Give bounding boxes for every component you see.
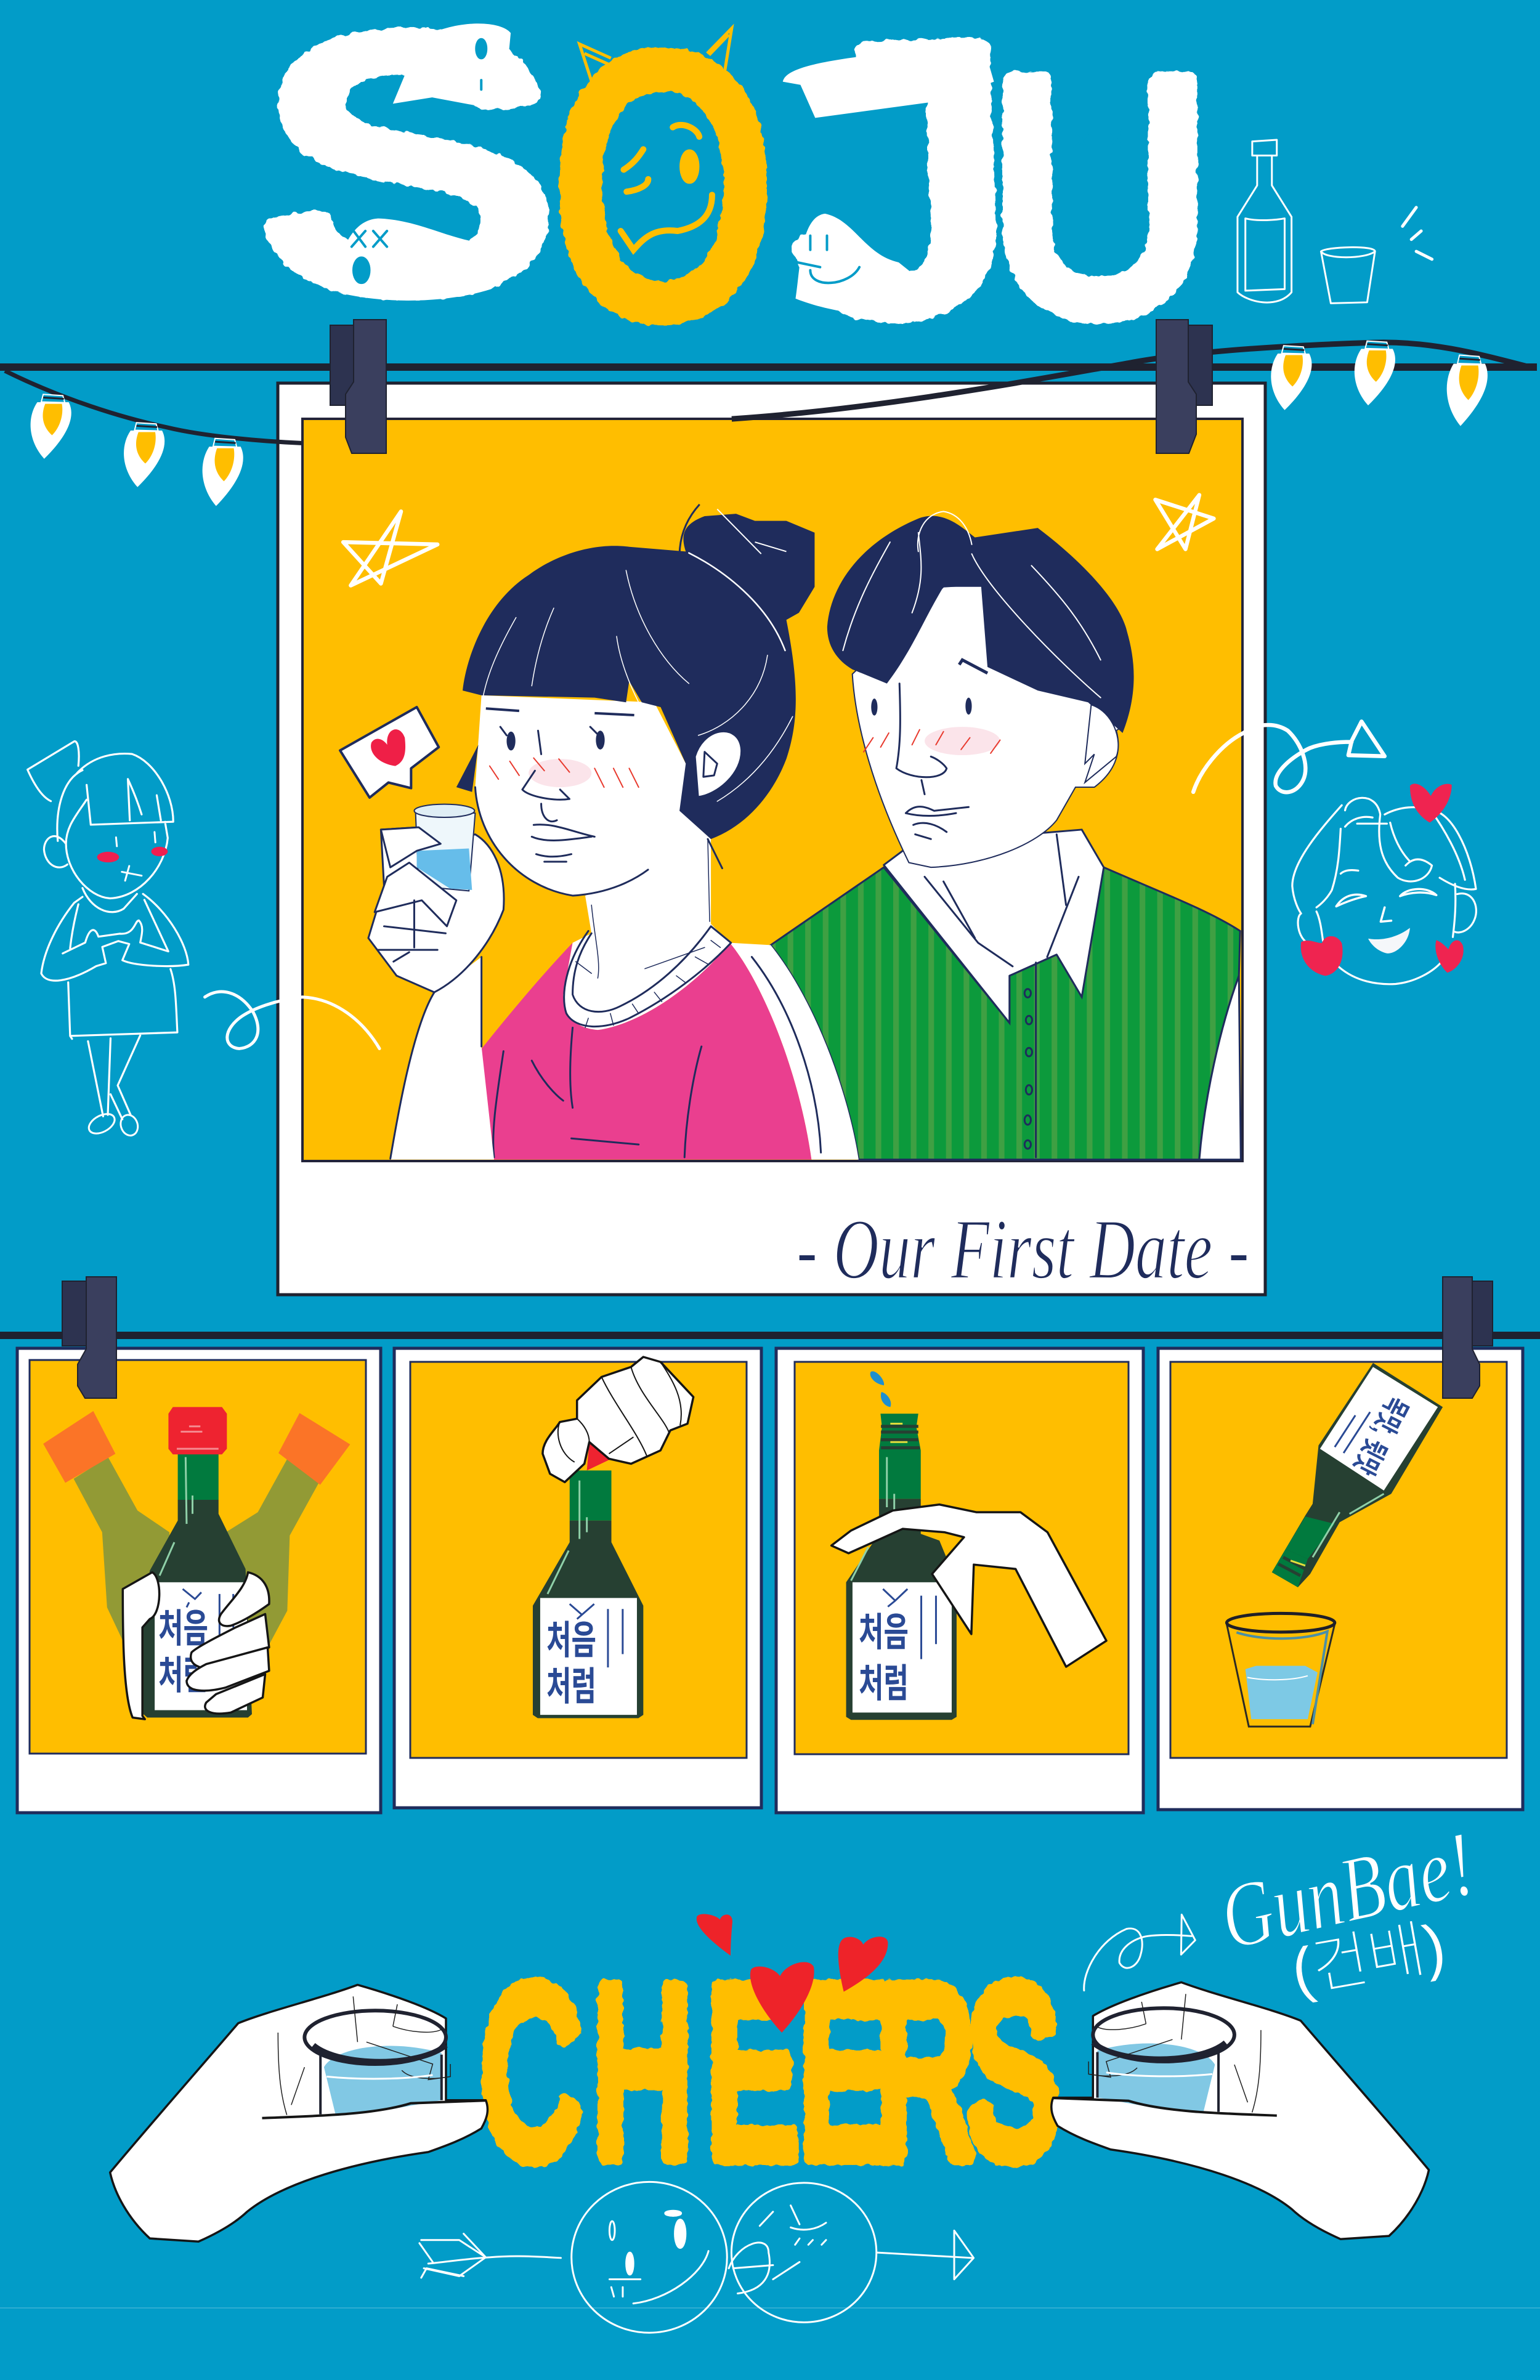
bottle label text: 처음	[546, 1618, 596, 1662]
hearts on face	[1301, 783, 1464, 976]
fingers on glass	[381, 827, 440, 867]
woman pink top	[482, 943, 811, 1160]
hand over bottle	[832, 1505, 1106, 1667]
red hearts	[697, 1914, 888, 2033]
woman	[368, 504, 859, 1160]
bottle label text line two: 처럼	[859, 1661, 909, 1706]
couple illustration	[340, 495, 1241, 1160]
face inside O	[621, 125, 712, 250]
man face	[853, 585, 1122, 867]
fist on cap	[543, 1357, 694, 1482]
clip: bottom right	[1443, 1277, 1493, 1398]
ghost head on J	[795, 214, 948, 319]
woman neck and collar	[563, 806, 730, 1030]
right light string	[732, 342, 1532, 419]
smile	[1368, 928, 1410, 953]
woman ear	[695, 732, 741, 796]
polaroid frame	[278, 383, 1265, 1295]
right hand with glass	[1052, 1982, 1429, 2239]
tilted bottle label text: 목맛, 뒷맛	[1347, 1391, 1413, 1479]
man facial features	[864, 660, 1000, 839]
man shirt and neck	[884, 830, 1104, 1023]
caption: our first date: - Our First Date -	[796, 1202, 1249, 1297]
bottom hanging string	[0, 1332, 1540, 1339]
woman arm	[391, 957, 494, 1160]
man hair	[827, 516, 1134, 733]
man vest	[771, 867, 1240, 1160]
top hanging string	[0, 363, 1537, 371]
photo yellow background	[302, 419, 1242, 1161]
left hand with glass	[110, 1985, 488, 2241]
main polaroid photo	[278, 383, 1265, 1297]
drops	[870, 1371, 891, 1407]
man	[771, 511, 1241, 1160]
kissing faces doodle	[572, 2182, 877, 2333]
woman face	[475, 695, 736, 896]
man arms	[1199, 976, 1241, 1160]
polaroid 4: pouring into glass	[1158, 1348, 1523, 1810]
faint horizontal line	[0, 2307, 1540, 2309]
star left	[343, 511, 437, 586]
doodle: bottle	[1238, 140, 1292, 302]
star right	[1155, 495, 1214, 549]
polaroid 3: tapping the bottle	[776, 1348, 1143, 1813]
cat ears on O	[580, 28, 732, 89]
red cap	[168, 1407, 227, 1454]
string lights	[5, 341, 1532, 506]
ghost head top of S	[393, 23, 511, 107]
korean gunbae text: (건배)	[1286, 1911, 1451, 2006]
doodle: glass	[1321, 247, 1375, 303]
loop arrow right	[1193, 721, 1385, 792]
brush top bar on J	[783, 41, 994, 118]
girl blush	[97, 847, 168, 862]
clip: main photo right	[1156, 320, 1212, 453]
olive arms	[74, 1457, 319, 1648]
left bulbs	[31, 394, 243, 506]
polaroid 1: bottle held up	[17, 1348, 381, 1813]
man ear	[1085, 705, 1118, 782]
bottle	[144, 1500, 252, 1717]
bottle	[846, 1499, 957, 1720]
vest buttons	[1024, 963, 1036, 1157]
arrow right	[877, 2230, 974, 2280]
woman hand	[368, 827, 504, 992]
woman hair	[463, 514, 814, 839]
title faces and cat ears	[334, 23, 1432, 319]
bottle label text line two: 처럼	[158, 1653, 208, 1698]
left light string	[5, 371, 301, 443]
bottle label text line two: 처럼	[546, 1664, 596, 1709]
hand gripping bottle	[123, 1572, 269, 1719]
right bulbs	[1271, 341, 1488, 426]
cheers illustration	[110, 1914, 1429, 2333]
cheers lettering: CHEERS	[481, 1939, 1059, 2204]
doodle: sparkle dashes	[1403, 208, 1432, 259]
shot glass	[1226, 1613, 1335, 1726]
clip: main photo left	[330, 320, 386, 453]
gunbae note	[1084, 1812, 1483, 2006]
title letter U: U	[989, 11, 1210, 379]
bottle	[533, 1521, 643, 1718]
woman facial features	[486, 708, 639, 862]
bottle label text: 처음	[859, 1610, 909, 1654]
woman cardigan strip	[730, 943, 859, 1160]
loop arrow left	[205, 992, 379, 1048]
orange cuffs	[43, 1411, 350, 1485]
polaroid 2: opening the cap	[394, 1348, 761, 1808]
tilted bottle	[1272, 1363, 1443, 1587]
curly arrow	[1084, 1914, 1195, 1991]
doodle: girl	[28, 742, 188, 1138]
title: SOJU	[257, 0, 1210, 433]
small faces on white letters	[352, 39, 1122, 283]
shot glass	[415, 811, 475, 891]
ghost head on S	[334, 219, 530, 301]
arrow left	[419, 2234, 561, 2278]
doodle: smiling face with hearts	[1292, 783, 1476, 984]
bottle label text: 처음	[158, 1606, 208, 1651]
speech bubble with heart	[340, 707, 439, 798]
clip: bottom left	[62, 1277, 116, 1398]
